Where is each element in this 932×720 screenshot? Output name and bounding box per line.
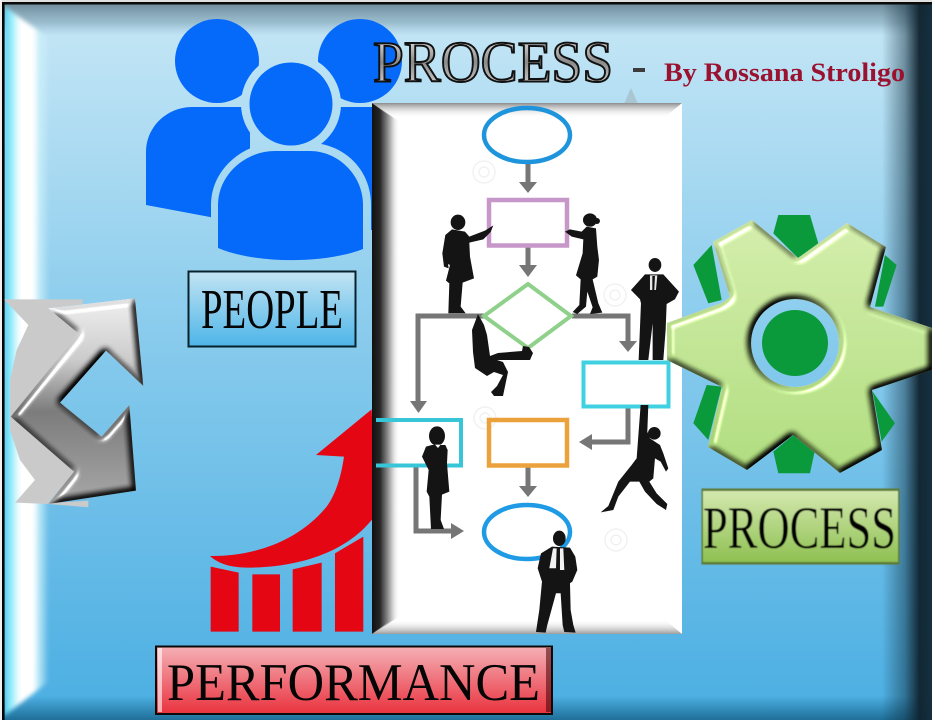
gear body: [667, 220, 932, 473]
gear centre: [762, 310, 828, 376]
icon: performance arrow and bars: [210, 409, 377, 632]
silhouettes bottom: [422, 405, 668, 633]
flowchart left cyan box: [376, 420, 461, 466]
gear back teeth: [693, 215, 897, 473]
label: PERFORMANCE: PERFORMANCE: [167, 654, 540, 712]
label: PEOPLE: PEOPLE: [201, 279, 343, 341]
flowchart right cyan box: [584, 362, 668, 406]
flowchart purple box: [489, 200, 567, 246]
icon: gear: [667, 215, 932, 473]
icon: people group: [146, 19, 402, 260]
flowchart end ellipse: [484, 505, 570, 559]
flowchart start ellipse: [484, 108, 570, 162]
byline: By Rossana Stroligo: [664, 58, 905, 87]
label: PEOPLE: [188, 272, 356, 346]
title: PROCESS: [373, 30, 613, 94]
flowchart orange box: [489, 420, 567, 466]
title dash: [633, 68, 645, 72]
flowchart connectors: [416, 164, 628, 531]
silhouette: falling man: [472, 314, 533, 396]
cycle arrows back shape: [4, 299, 88, 507]
cycle arrows front shape: [11, 298, 143, 504]
small grey arrow tip: [624, 88, 638, 104]
flowchart green diamond: [484, 284, 571, 348]
silhouettes top: [442, 213, 679, 360]
icon: cycle arrows: [4, 298, 143, 507]
title: [373, 30, 905, 94]
flowchart arrowheads: [410, 182, 637, 539]
panel: flowchart: [372, 103, 682, 634]
